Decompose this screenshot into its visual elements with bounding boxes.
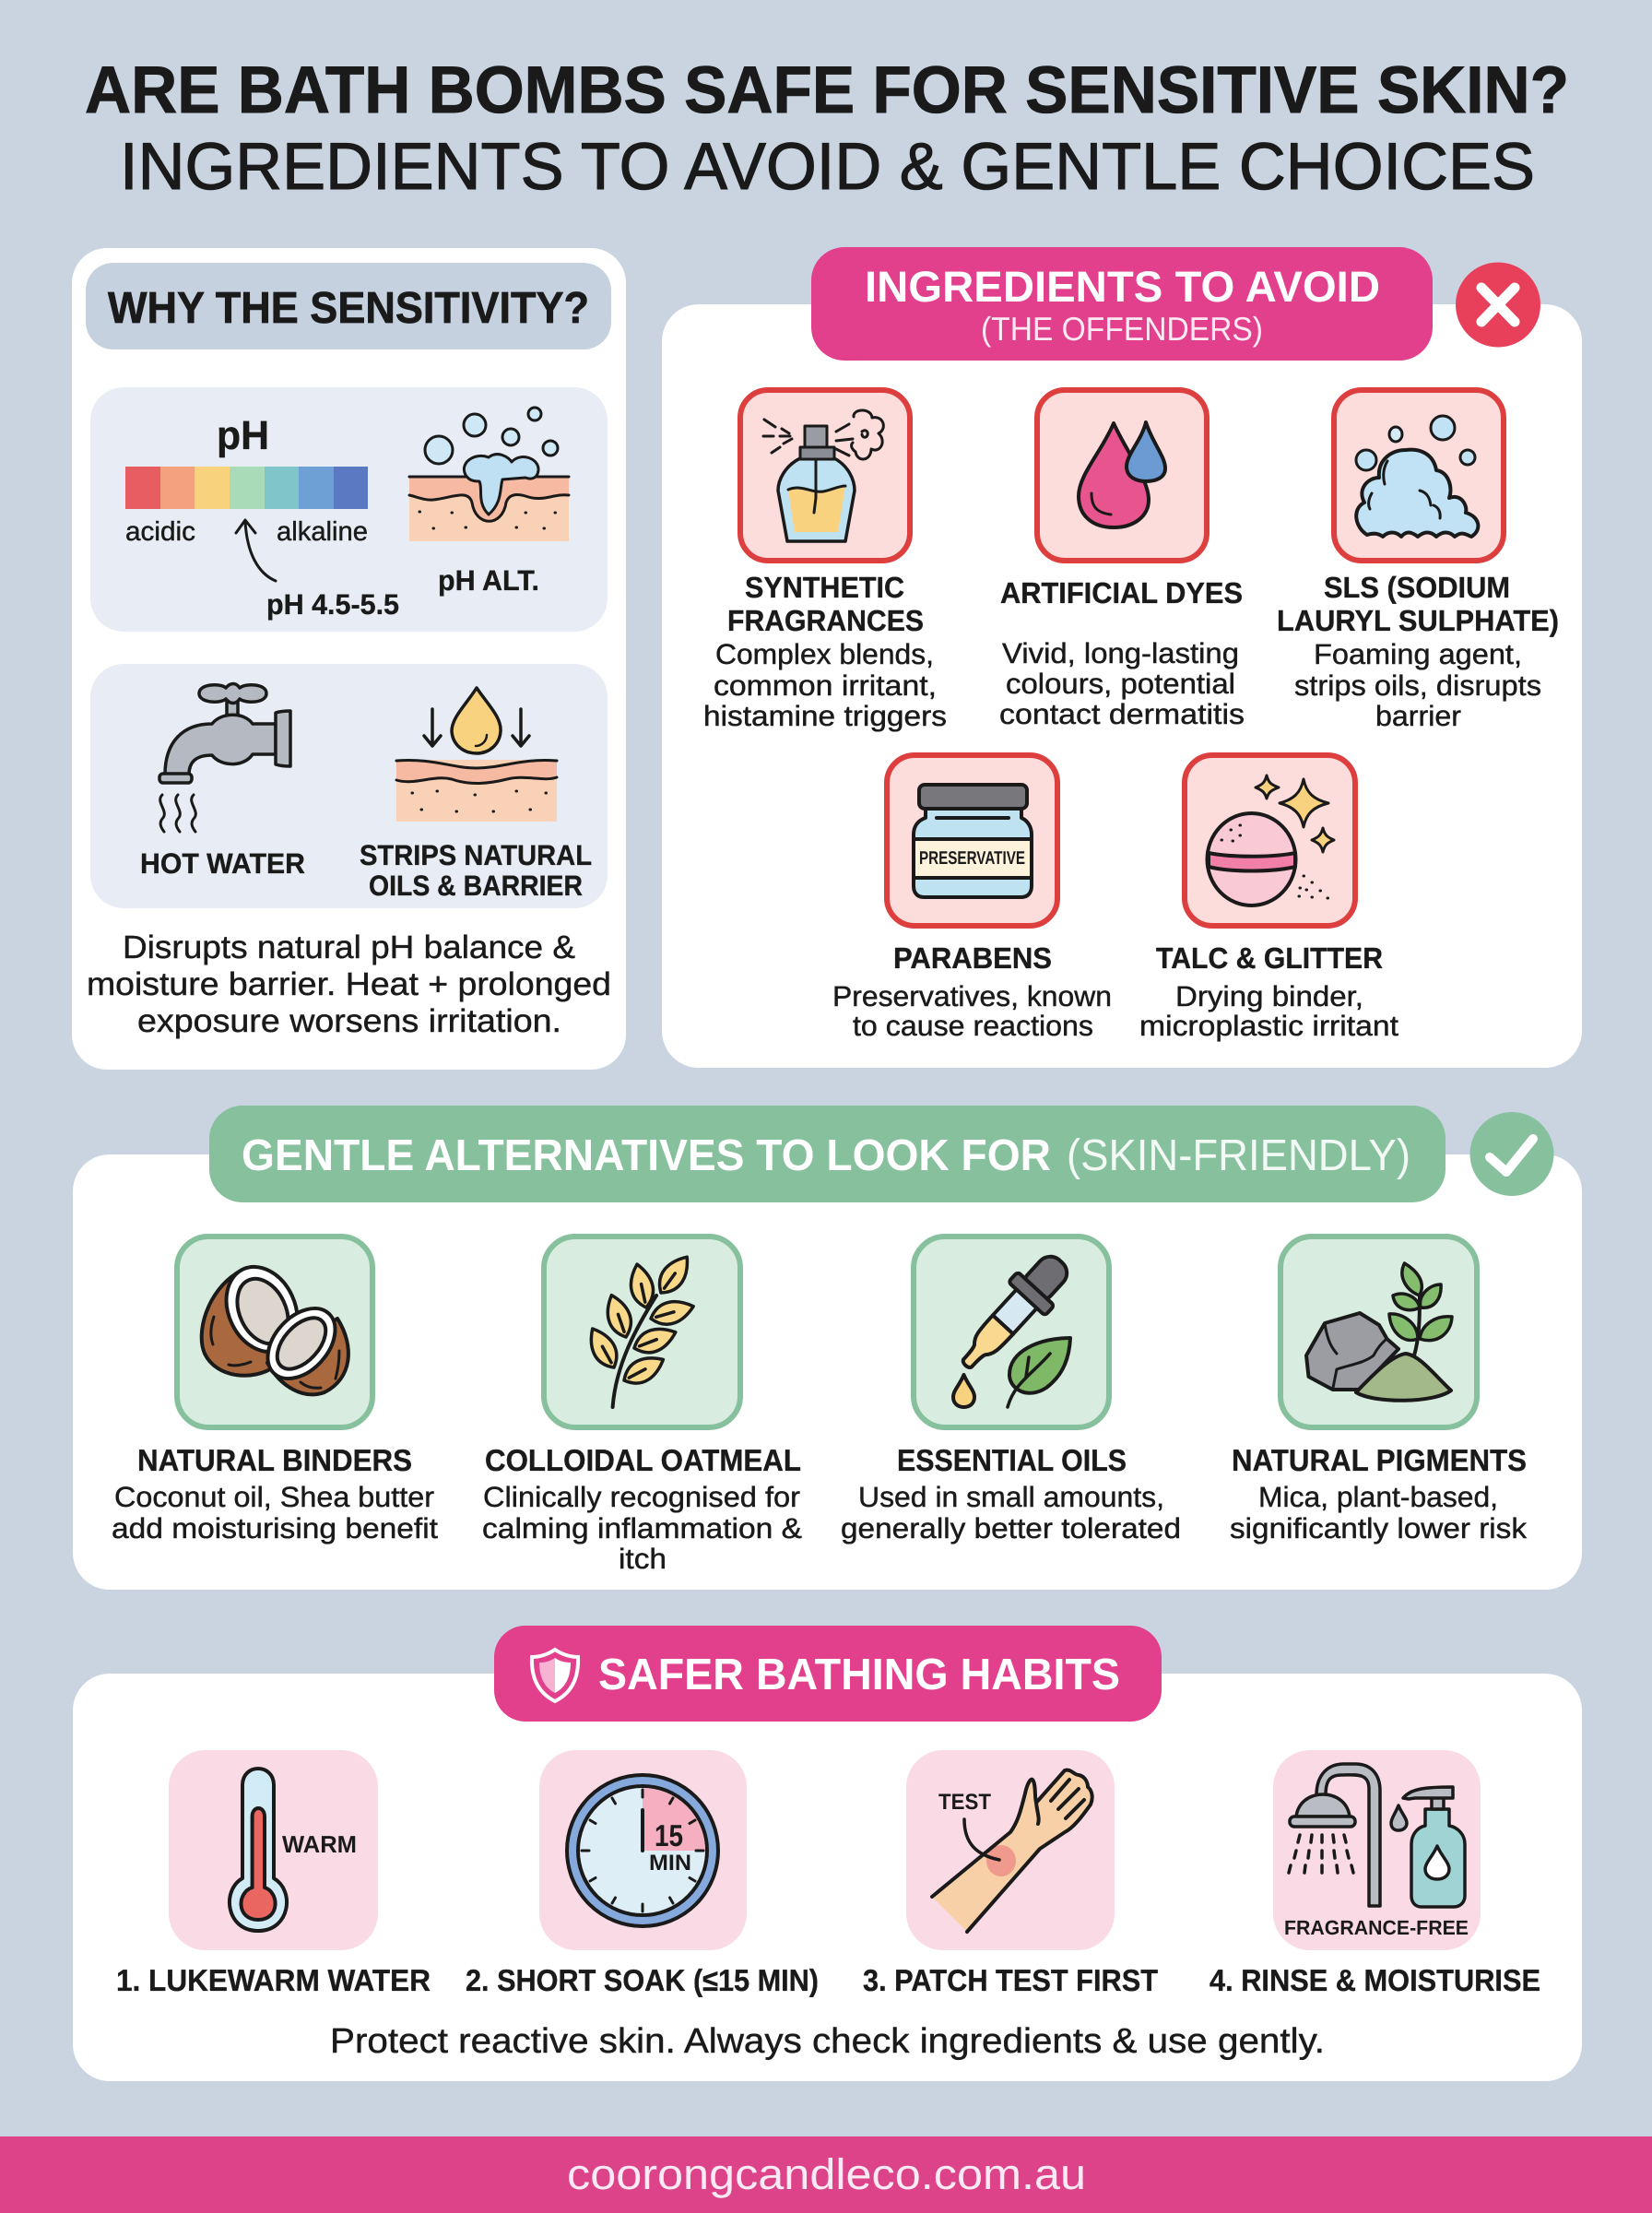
text: SLS: LAURYL SULPHATE) [1277,604,1559,637]
icon: oat sprig [544,1237,740,1427]
label: lukewarm water: 1. LUKEWARM WATER [116,1963,431,1997]
text: artificial dyes: ARTIFICIAL DYES [1000,576,1243,609]
title: ARE BATH BOMBS SAFE FOR SENSITIVE SKIN? [85,53,1569,127]
title: INGREDIENTS TO AVOID & GENTLE CHOICES [120,130,1535,204]
icon: dropper and leaf [914,1237,1109,1427]
footer [0,2136,1652,2213]
icon: oil drop on stripped skin barrier [396,688,557,822]
text: natural pigments [1230,1443,1528,1544]
text: artificial dyes: contact dermatitis [999,698,1245,730]
banner: ingredients to avoid: INGREDIENTS TO AVOID [865,262,1380,311]
icon: coconut [177,1237,372,1427]
footer: coorongcandleco.com.au [567,2149,1086,2198]
panel: safer bathing habits [73,1626,1582,2081]
text: SLS: strips oils, disrupts [1294,669,1541,702]
icon: 15 minute timer [539,1750,747,1950]
text: parabens [832,941,1112,1042]
text: natural pigments: significantly lower risk [1230,1512,1528,1544]
text: essential oils: Used in small amounts, [858,1481,1164,1513]
icon: dye drops [1037,390,1207,561]
icon: patch test on arm [906,1750,1115,1950]
chart: pH scale: pH [217,413,269,458]
text: synthetic fragrances: SYNTHETIC [745,571,904,604]
text: synthetic fragrances: histamine triggers [703,700,947,732]
description: why: Disrupts natural pH balance & [123,929,575,965]
text: colloidal oatmeal: itch [619,1543,667,1575]
panel: why the sensitivity [72,248,626,1070]
text: artificial dyes: colours, potential [1006,668,1235,700]
text: SLS: Foaming agent, [1314,638,1522,670]
sub-panel: hot water and barrier [90,664,608,908]
banner: ingredients to avoid [811,247,1433,361]
chart: pH scale: alkaline [277,517,368,547]
text: synthetic fragrances: FRAGRANCES [727,604,924,637]
chart: pH scale [125,413,399,621]
text: talc and glitter: Drying binder, [1175,980,1363,1012]
text: talc and glitter: TALC & GLITTER [1156,941,1383,975]
text: essential oils: generally better tolerated [841,1512,1181,1544]
banner: safer bathing habits [494,1626,1162,1722]
label: strips natural oils and barrier: STRIPS NATURAL [360,839,592,871]
icon: thermometer: WARM [282,1830,357,1858]
text: synthetic fragrances: common irritant, [714,669,937,702]
panel: ingredients to avoid [662,247,1582,1068]
heading: why the sensitivity: WHY THE SENSITIVITY? [108,284,589,333]
description: why: moisture barrier. Heat + prolonged [87,966,611,1002]
text: parabens: PARABENS [893,941,1052,975]
text: essential oils: ESSENTIAL OILS [897,1443,1127,1477]
text: natural binders: add moisturising benefit [112,1512,438,1544]
label: strips natural oils and barrier: OILS & BARRIER [369,870,583,902]
icon: perfume spray [740,390,910,561]
text: natural binders: Coconut oil, Shea butter [114,1481,434,1513]
text: artificial dyes [999,576,1245,730]
banner: safer bathing habits: SAFER BATHING HABITS [598,1651,1120,1699]
text: natural pigments: Mica, plant-based, [1258,1481,1498,1513]
icon: foam [1334,390,1504,561]
text: synthetic fragrances [703,571,947,732]
banner: gentle alternatives: GENTLE ALTERNATIVES TO LOOK FOR [242,1131,1051,1180]
label: rinse and moisturise: 4. RINSE & MOISTURISE [1210,1963,1540,1997]
text: natural binders [112,1443,438,1544]
sub-panel: pH scale and alteration [90,387,608,632]
text: parabens: Preservatives, known [832,980,1112,1012]
icon: 15 minute timer: MIN [649,1851,691,1876]
icon: preservative jar: PRESERVATIVE [919,848,1025,869]
text: synthetic fragrances: Complex blends, [715,638,934,670]
text: talc and glitter [1139,941,1398,1042]
chart: pH scale: pH 4.5-5.5 [266,588,399,621]
label: strips natural oils and barrier [360,839,592,902]
icon: red cross [1456,262,1540,347]
text: essential oils [841,1443,1181,1544]
text: natural pigments: NATURAL PIGMENTS [1232,1443,1527,1477]
title [85,53,1569,204]
banner: ingredients to avoid: (THE OFFENDERS) [981,310,1263,348]
icon: 15 minute timer: 15 [655,1818,683,1852]
icon: patch test on arm: TEST [938,1790,991,1815]
label: patch test: 3. PATCH TEST FIRST [863,1963,1158,1997]
description: why: exposure worsens irritation. [137,1003,561,1039]
icon: rock, powder and plant [1280,1237,1477,1427]
banner: gentle alternatives: (SKIN-FRIENDLY) [1067,1131,1410,1180]
text: parabens: to cause reactions [853,1010,1093,1042]
icon: hot water faucet [159,684,290,832]
description: why [87,929,611,1039]
banner: gentle alternatives [209,1106,1446,1202]
icon: green check [1469,1112,1554,1196]
label: pH alt: pH ALT. [438,564,539,597]
icon: preservative jar [887,755,1057,926]
text: SLS: barrier [1375,700,1461,732]
text: colloidal oatmeal: COLLOIDAL OATMEAL [485,1443,801,1477]
text: colloidal oatmeal: Clinically recognised for [483,1481,800,1513]
heading: why the sensitivity [86,263,611,349]
text: artificial dyes: Vivid, long-lasting [1002,637,1239,669]
icon: pH altered skin with bubbles [409,408,569,541]
text: natural binders: NATURAL BINDERS [137,1443,412,1477]
text: SLS: SLS (SODIUM [1324,571,1510,604]
text: colloidal oatmeal [482,1443,802,1575]
icon: shower and fragrance-free wash [1273,1750,1481,1950]
closing line: Protect reactive skin. Always check ingredients & use gently. [330,2022,1325,2061]
icon: bath bomb and glitter [1185,755,1355,926]
label: hot water: HOT WATER [140,847,305,880]
chart: pH scale: acidic [125,517,195,547]
icon: shower and fragrance-free wash: FRAGRANCE-FREE [1284,1916,1469,1939]
icon: thermometer [169,1750,378,1950]
panel: gentle alternatives [73,1106,1582,1590]
text: talc and glitter: microplastic irritant [1139,1010,1398,1042]
label: short soak: 2. SHORT SOAK (≤15 MIN) [466,1963,819,1997]
text: colloidal oatmeal: calming inflammation & [482,1512,802,1544]
text: SLS [1277,571,1559,732]
